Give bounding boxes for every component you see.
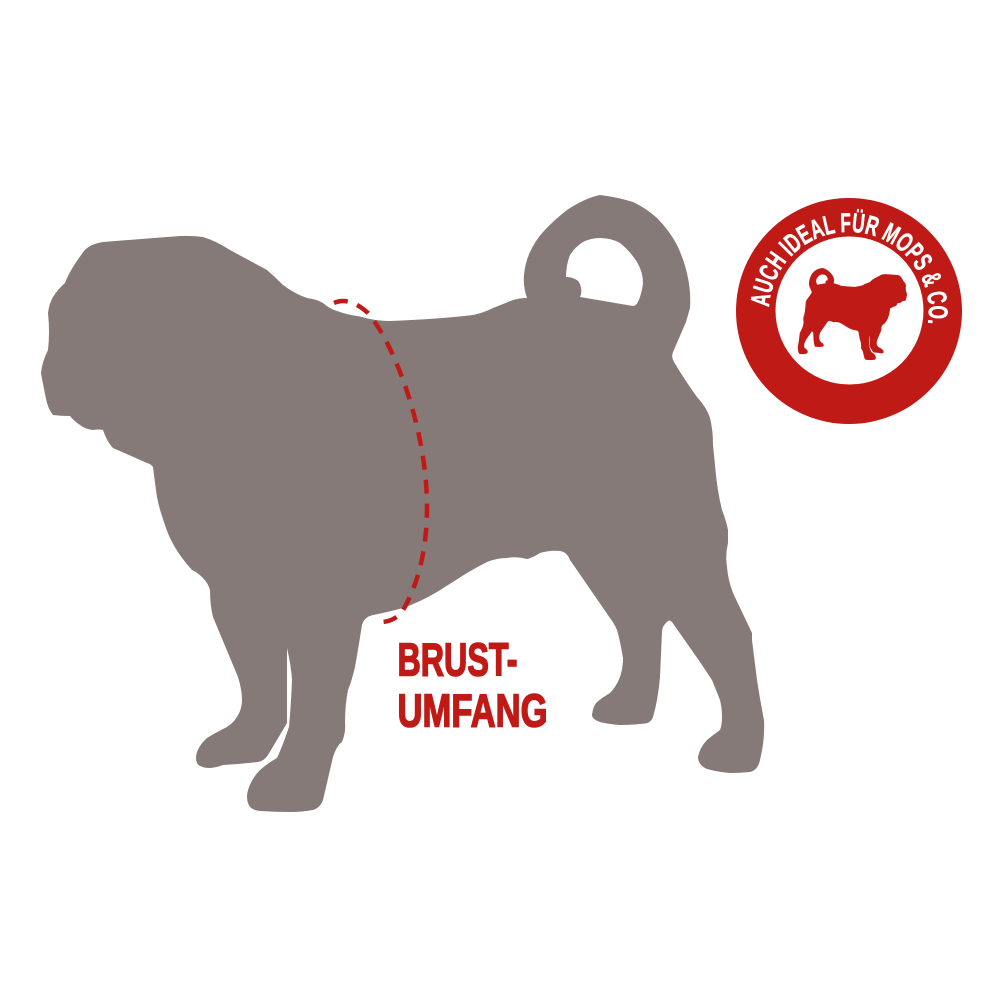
chest girth dashed measuring line bbox=[334, 301, 427, 622]
icon: small pug bbox=[798, 268, 907, 360]
badge curved text: AUCH IDEAL FÜR MOPS & CO. bbox=[750, 208, 948, 324]
badge: also ideal for pugs bbox=[736, 198, 962, 424]
badge inner circle bbox=[776, 236, 924, 384]
pug silhouette bbox=[41, 195, 764, 812]
badge outer ring bbox=[736, 198, 962, 424]
label: chest girth: UMFANG bbox=[398, 684, 548, 736]
label: chest girth bbox=[398, 634, 548, 736]
label: chest girth: BRUST- bbox=[398, 634, 518, 686]
